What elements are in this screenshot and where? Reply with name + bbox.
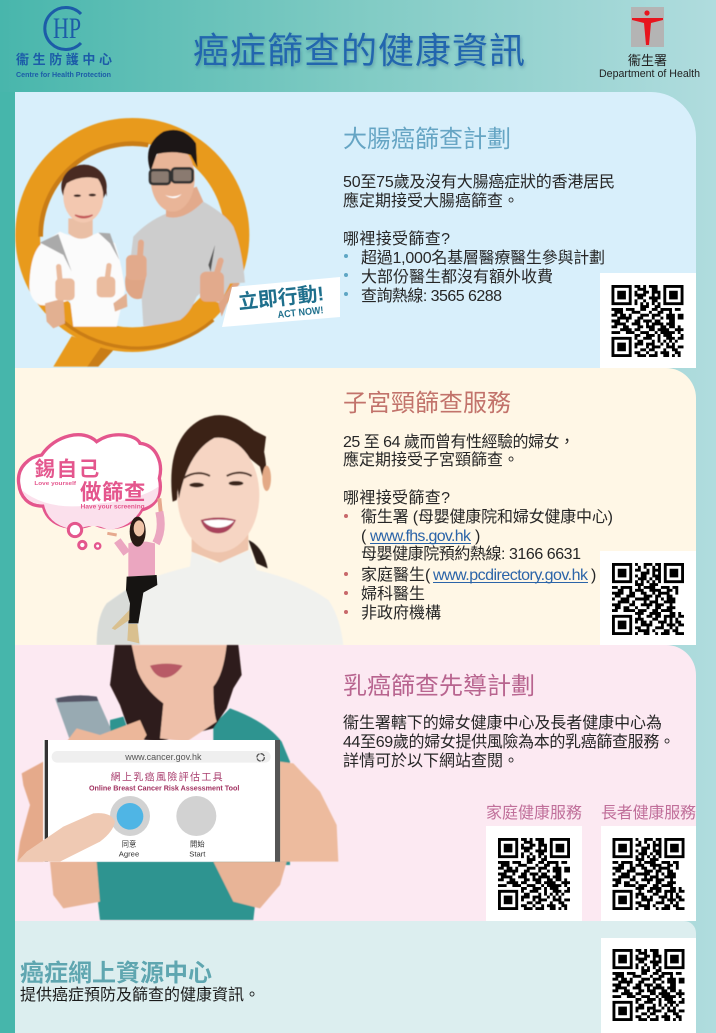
thought bubble: 錫自己	[34, 458, 99, 481]
thought bubble	[18, 435, 160, 549]
man	[126, 202, 245, 326]
text block: eligibility and where: (	[361, 528, 367, 545]
panel: breast cancer screening	[15, 645, 696, 921]
panel: cervical screening	[15, 368, 696, 645]
text block: eligibility and where: )	[475, 528, 480, 545]
label and QR: elderly health service	[601, 804, 696, 921]
logo: Department of Health: Department of Health	[599, 68, 700, 80]
text block: service description: 詳情可於以下網站查閱。	[343, 752, 519, 770]
text block: eligibility and where: 超過1,000名基層醫療醫生參與計劃	[361, 249, 605, 267]
panel: bowel cancer screening	[15, 92, 696, 368]
label and QR: elderly health service: 長者健康服務	[601, 804, 696, 822]
banner: act now: 立即行動!	[237, 281, 325, 314]
text block: eligibility and where: (	[425, 567, 431, 584]
thought bubble: 做篩查	[80, 480, 145, 504]
text block: 提供癌症預防及篩查的健康資訊。	[20, 985, 260, 1004]
heading: 子宮頸篩查服務	[343, 390, 511, 417]
logo: Department of Health: 衞生署	[628, 53, 667, 68]
text block: eligibility and where: 哪裡接受篩查?	[343, 229, 450, 248]
text block: eligibility and where: 50至75歲及沒有大腸癌症狀的香港居民	[343, 173, 615, 191]
phone screen: 開始	[190, 840, 205, 849]
text block: eligibility and where: 應定期接受大腸癌篩查。	[343, 191, 519, 210]
phone screen: 同意	[122, 840, 136, 849]
text block: eligibility and where: 查詢熱線: 3565 6288	[361, 287, 502, 305]
logo: Department of Health	[599, 7, 700, 80]
banner: act now	[222, 277, 340, 327]
label and QR: family health service: 家庭健康服務	[486, 804, 582, 822]
phone screen: Agree	[119, 850, 139, 859]
QR code	[600, 273, 696, 368]
heading: 癌症網上資源中心	[20, 960, 212, 987]
illustration: woman holding phone	[17, 645, 338, 920]
text block: eligibility and where: 25 至 64 歲而曾有性經驗的婦女，	[343, 432, 575, 451]
thought bubble: Have your screening	[81, 504, 145, 510]
text block: eligibility and where: www.fhs.gov.hk	[369, 528, 472, 545]
text block: eligibility and where: 大部份醫生都沒有額外收費	[361, 268, 553, 286]
logo: Centre for Health Protection	[16, 8, 112, 79]
phone screen: 網上乳癌風險評估工具	[111, 771, 223, 784]
text block: eligibility and where: www.pcdirectory.gov.hk	[432, 567, 589, 584]
illustration: magnifier with two people	[28, 130, 245, 367]
text block: eligibility and where	[343, 173, 615, 305]
text block: service description	[343, 713, 675, 770]
logo: Centre for Health Protection: 衞生防護中心	[16, 52, 112, 67]
heading: 大腸癌篩查計劃	[343, 126, 511, 153]
text block: service description: 衞生署轄下的婦女健康中心及長者健康中心為	[343, 713, 662, 732]
banner: act now: ACT NOW!	[277, 305, 324, 321]
panel: online cancer resource centre	[15, 921, 696, 1033]
QR code	[600, 551, 696, 645]
label and QR: family health service	[486, 804, 582, 921]
logo: Centre for Health Protection: HP	[53, 12, 81, 45]
phone screen	[17, 740, 280, 862]
heading: 乳癌篩查先導計劃	[343, 673, 535, 700]
text block: eligibility and where: 哪裡接受篩查?	[343, 488, 450, 507]
thought bubble: Love yourself	[34, 481, 76, 487]
text block: eligibility and where: 衞生署 (母嬰健康院和婦女健康中心)	[361, 507, 613, 526]
woman	[29, 232, 125, 327]
phone screen: Start	[189, 850, 206, 859]
logo: Centre for Health Protection: Centre for Health Protection	[16, 70, 111, 79]
text block: eligibility and where: 母嬰健康院預約熱線: 3166 6631	[361, 545, 581, 563]
text block: eligibility and where: 婦科醫生	[361, 585, 425, 603]
text block: eligibility and where: 家庭醫生	[361, 566, 425, 584]
QR code	[601, 938, 696, 1033]
text block: eligibility and where: )	[591, 567, 596, 584]
phone screen: www.cancer.gov.hk	[124, 752, 202, 762]
small woman figure	[107, 498, 161, 643]
illustration: woman with thought bubble	[18, 415, 343, 645]
text block: eligibility and where: 非政府機構	[361, 604, 441, 622]
text block: eligibility and where: 應定期接受子宮頸篩查。	[343, 450, 519, 469]
title: 癌症篩查的健康資訊	[193, 30, 525, 71]
text block: service description: 44至69歲的婦女提供風險為本的乳癌篩查服務。	[343, 732, 675, 751]
text block: eligibility and where	[343, 432, 613, 622]
phone screen: Online Breast Cancer Risk Assessment Tool	[89, 785, 239, 792]
